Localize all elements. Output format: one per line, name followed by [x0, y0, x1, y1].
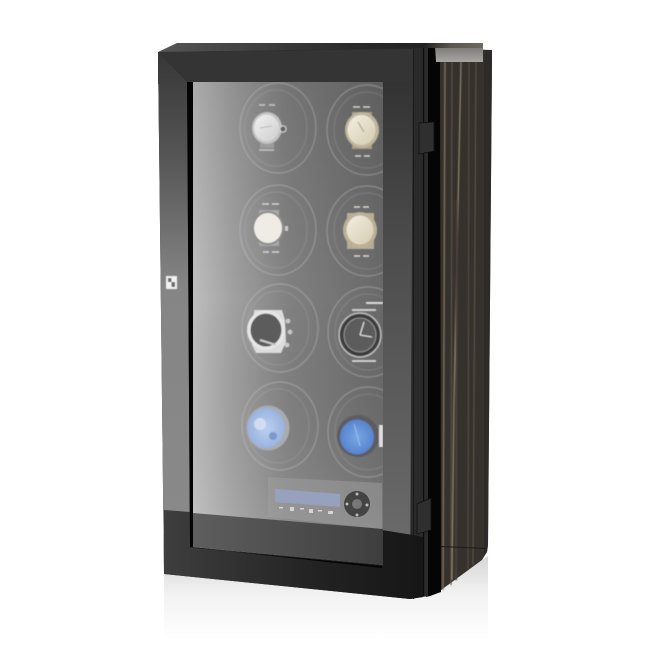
watch 8	[337, 415, 383, 457]
door edge strip	[410, 48, 428, 599]
keypad	[344, 491, 370, 517]
frame right rail	[383, 82, 413, 540]
watch 3	[252, 204, 288, 252]
side panel: ebony wood	[426, 48, 492, 597]
front door frame	[158, 48, 428, 599]
wood inlay stripes	[443, 62, 476, 590]
glossy lower band	[164, 510, 423, 599]
watch 5	[247, 310, 292, 353]
glass inner black edge	[187, 82, 382, 568]
upper hinge	[419, 122, 434, 154]
frame left rail	[158, 52, 190, 574]
logo badge	[166, 276, 177, 289]
watches	[246, 105, 383, 457]
glass lower dark band	[193, 513, 383, 565]
watch 7	[246, 406, 290, 450]
watch 1	[252, 105, 286, 150]
metal top band	[435, 48, 483, 62]
glass window	[193, 82, 383, 565]
black gap strip	[426, 48, 441, 597]
right dark edge	[484, 50, 492, 556]
menu buttons	[279, 507, 333, 514]
watch 4	[343, 207, 377, 256]
frame top rail	[158, 49, 413, 84]
top plate	[158, 43, 483, 52]
watch 6	[339, 302, 383, 362]
winder recess rings	[239, 82, 383, 478]
product photo: watch winder cabinet	[158, 43, 492, 612]
watch 2	[345, 107, 379, 156]
floor reflection	[164, 556, 488, 640]
lcd display	[275, 489, 340, 507]
control panel	[268, 477, 382, 529]
lower hinge	[417, 498, 431, 534]
seam	[440, 546, 487, 549]
